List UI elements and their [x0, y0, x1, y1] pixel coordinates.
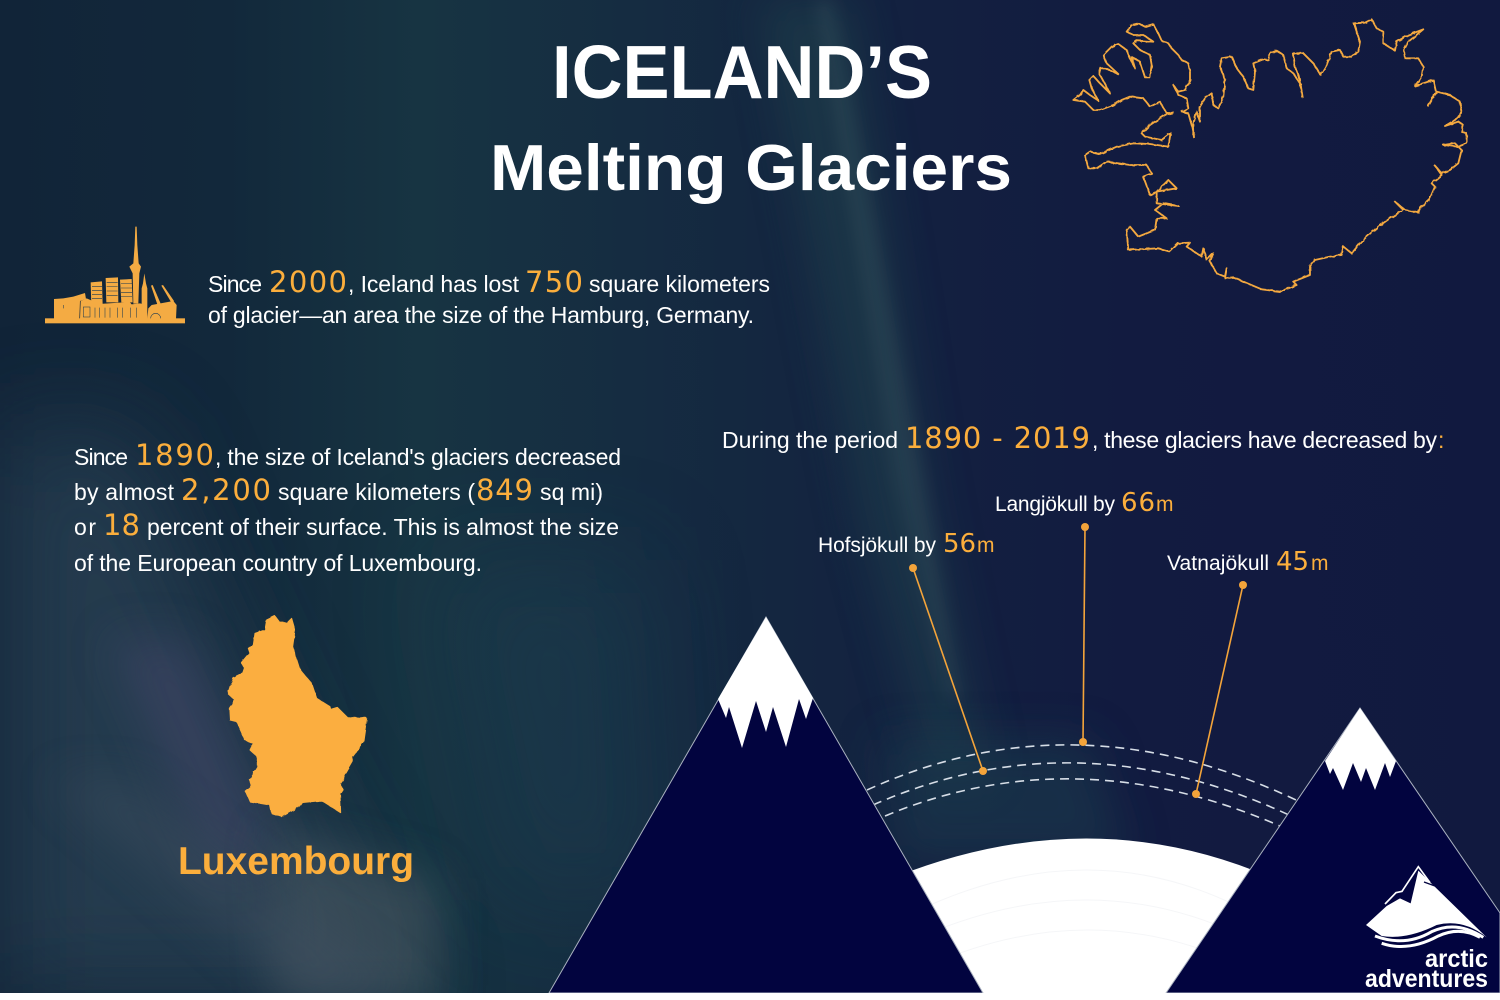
logo: arctic adventures: arctic [1425, 945, 1488, 973]
text block: Luxembourg comparison: , the size of Iceland's glaciers decreased [215, 444, 621, 470]
text block: Luxembourg comparison: 1890 [135, 438, 214, 472]
text block: Hamburg comparison: Since [208, 271, 262, 297]
icon: Hamburg skyline [45, 227, 185, 323]
mountain: left peak [549, 617, 983, 993]
callout: Vatnajökull [1167, 547, 1328, 798]
text block: Luxembourg comparison: 2,200 [181, 473, 271, 507]
callout: Langjökull: Langjökull by [995, 493, 1116, 516]
text block: Luxembourg comparison: 18 [103, 508, 140, 542]
text block: period heading [722, 421, 1444, 455]
text block: Hamburg comparison: 2000 [269, 265, 347, 299]
text block: period heading: 1890 - 2019 [905, 421, 1090, 455]
glacier: white ice field [895, 838, 1270, 993]
logo: arctic adventures [1365, 867, 1488, 993]
callout: Hofsjökull [818, 529, 994, 775]
callout: Langjökull: m [1156, 493, 1174, 516]
title [490, 30, 1012, 204]
text block: Luxembourg comparison: by almost [74, 479, 175, 505]
mountain: right peak [1166, 708, 1500, 993]
text block: Luxembourg comparison: sq mi) [540, 479, 603, 505]
text block: Hamburg comparison: of glacier—an area the size of the Hamburg, Germany. [208, 302, 754, 328]
map: Luxembourg silhouette [228, 616, 367, 817]
title: Melting Glaciers [490, 131, 1012, 204]
callout: Vatnajökull: m [1311, 552, 1328, 575]
text block: Hamburg comparison: square kilometers [589, 271, 770, 297]
text block: Hamburg comparison: 750 [525, 265, 583, 299]
glacier retreat lines [867, 745, 1296, 826]
text block: Hamburg comparison: , Iceland has lost [348, 271, 520, 297]
text block: Luxembourg comparison: percent of their surface. This is almost the size [147, 514, 619, 540]
text block: Luxembourg comparison: or [74, 514, 96, 540]
callout: Langjökull [995, 488, 1174, 746]
title: ICELAND’S [552, 30, 932, 114]
logo: arctic adventures: adventures [1365, 965, 1488, 993]
text block: Luxembourg comparison: square kilometers ( [278, 479, 475, 505]
text block: Luxembourg comparison [74, 438, 621, 576]
text block: period heading: : [1438, 427, 1444, 453]
map: Iceland outline [1073, 19, 1467, 292]
text block: period heading: During the period [722, 427, 898, 453]
callout: Hofsjökull: Hofsjökull by [818, 534, 936, 557]
text block: Luxembourg comparison: Since [74, 444, 128, 470]
callout: Langjökull: 66 [1121, 488, 1155, 518]
text block: Hamburg comparison [208, 265, 770, 328]
bottom page strip [0, 993, 1500, 1000]
callout: Hofsjökull: m [977, 534, 994, 557]
text block: Luxembourg comparison: of the European country of Luxembourg. [74, 550, 482, 576]
callout: Vatnajökull: Vatnajökull [1167, 552, 1269, 575]
label: Luxembourg: Luxembourg [178, 840, 414, 883]
callout: Vatnajökull: 45 [1276, 547, 1309, 577]
callout: Hofsjökull: 56 [943, 529, 976, 559]
text block: period heading: , these glaciers have decreased by [1092, 427, 1438, 453]
text block: Luxembourg comparison: 849 [476, 473, 533, 507]
